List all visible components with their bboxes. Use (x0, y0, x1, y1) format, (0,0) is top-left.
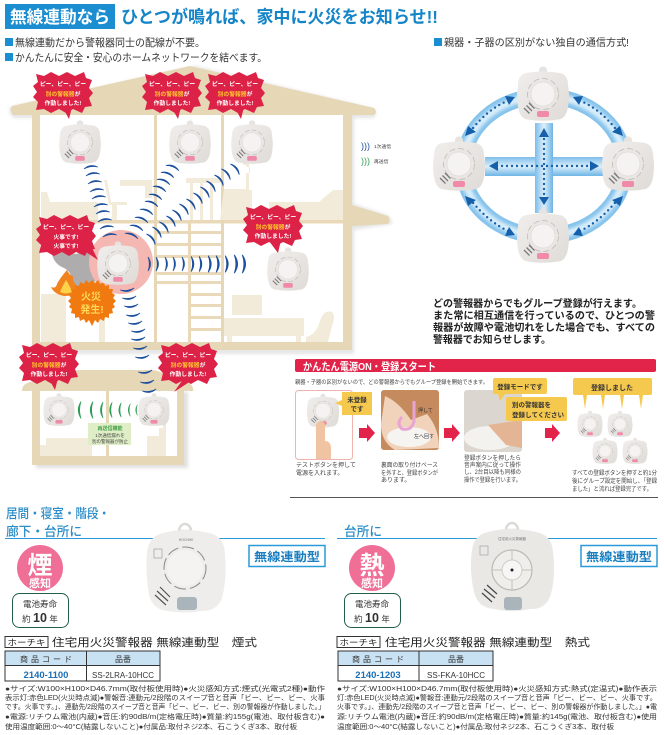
title headline: ひとつが鳴れば、家中に火災をお知らせ!! (121, 7, 438, 27)
burst: basement left: 作動しました! (31, 370, 67, 378)
burst: fire alarm: ピー、ピー、ピー (43, 224, 89, 231)
network detectors (433, 66, 654, 263)
steps intro: 親器・子器の区別がないので、どの警報器からでもグループ登録を開始できます。 (295, 378, 488, 386)
spec text: 温度範囲:0～40°C(結露しないこと)●付属品:取付ネジ2本、石こうくぎ3本、取付板 (337, 722, 614, 731)
panel: heat detector product (337, 523, 657, 731)
panel: network diagram (433, 36, 656, 346)
battery life (344, 594, 400, 628)
heat badge (349, 545, 395, 591)
burst: top left: ピー、ピー、ピー (40, 81, 86, 88)
house structure (10, 66, 392, 354)
burst: top right: 作動しました! (217, 99, 253, 107)
category heading: 廊下・台所に (6, 524, 82, 539)
smoke badge: 煙 (27, 552, 53, 580)
product name (337, 635, 590, 649)
burst: top right: 別の警報器が (218, 90, 253, 98)
heat badge: 熱 (359, 552, 385, 580)
smoke badge (17, 545, 63, 591)
wave legend (361, 141, 391, 166)
step 4: ました」と流れば登録完了です。 (572, 485, 652, 493)
step 4: すべての登録ボタンを押すと約1分 (572, 469, 657, 477)
furniture silhouettes (41, 162, 343, 342)
network description: また常に相互通信を行っているので、ひとつの警 (433, 309, 656, 322)
step 3 (464, 378, 567, 484)
battery life (12, 594, 68, 628)
wireless type tag: 無線連動型 (254, 549, 320, 564)
burst: basement right: 別の警報器が (171, 361, 206, 369)
staircase (157, 223, 222, 342)
burst: basement left: ピー、ピー、ピー (26, 352, 72, 359)
burst: right room: 別の警報器が (256, 223, 291, 231)
burst: top right (205, 72, 265, 119)
wave legend: ))) (361, 156, 370, 166)
burst: fire alarm (36, 215, 98, 260)
network description: 警報器でお知らせします。 (433, 333, 551, 346)
category heading: 台所に (344, 524, 382, 539)
wireless waves: blue (84, 162, 246, 393)
spec text: 灯:赤色LED(火災時点滅)●警報音:連動元/2段階のスイープ音と音声「ビー、ビー、ビー、火事です。 (337, 693, 657, 702)
spec text: ●サイズ:W100×H100×D46.7mm(取付板使用時)●火災感知方式:煙式(光電式2種)●動作 (5, 684, 325, 693)
step 1: テストボタンを押して (296, 461, 356, 469)
step 1: 電源を入れます。 (296, 469, 343, 477)
burst: fire alarm: 火事です! (53, 233, 79, 241)
fire burst label (68, 280, 116, 326)
wave legend: 1次通信 (374, 143, 391, 150)
product table (338, 651, 493, 681)
product name: ホーチキ (8, 638, 46, 648)
product name (5, 635, 257, 649)
resend note: 1次通信漏れを (95, 432, 125, 439)
burst: right room: 作動しました! (255, 232, 291, 240)
fire burst label: 火災 (81, 291, 101, 303)
speech bursts (19, 72, 303, 392)
burst: basement right: 作動しました! (170, 370, 206, 378)
burst: top left: 別の警報器が (46, 90, 81, 98)
arrow 3 (545, 424, 560, 442)
spec text: ●サイズ:W100×H100×D46.7mm(取付板使用時)●火災感知方式:熱式(定温式)●動作表示 (337, 684, 657, 693)
bullet text: left: かんたんに安全・安心のホームネットワークを結べます。 (15, 51, 267, 64)
wave legend: 再送信 (374, 158, 389, 165)
category heading: 居間・寝室・階段・ (6, 506, 110, 521)
product table: 商品コード (20, 654, 72, 664)
smoke (52, 252, 100, 286)
battery life: 約 10 年 (22, 611, 58, 625)
resend note: 再送信機能 (97, 425, 123, 432)
wireless type tag: 無線連動型 (586, 549, 652, 564)
burst: top centre: 作動しました! (154, 99, 190, 107)
burst: basement right (158, 343, 218, 392)
steps banner (295, 359, 656, 373)
product table: 品番 (448, 654, 464, 664)
house illustration (10, 66, 392, 468)
network description: 報器が故障や電池切れをした場合でも、すべての (433, 321, 655, 334)
burst: top centre: 別の警報器が (155, 90, 190, 98)
smoke badge: 感知 (29, 576, 51, 590)
product photo: heat detector (471, 523, 554, 611)
fire flame (51, 270, 81, 296)
step 3: 登録してください (512, 410, 564, 419)
spec text (5, 684, 325, 731)
step 3: 登録ボタンを押したら (464, 454, 521, 462)
network heading: 親器・子器の区別がない独自の通信方式! (444, 36, 629, 49)
step 2: 左へ回す (414, 433, 434, 440)
alarm glow (89, 230, 153, 294)
spec text: 表示灯:赤色LED(火災時点滅)●警報音:連動元/2段階のスイープ音と音声「ビー、ビー、ビー、火事 (5, 693, 325, 702)
product table: SS-FKA-10HCC (427, 671, 485, 680)
burst: right room: ピー、ピー、ピー (250, 214, 296, 221)
product table: 品番 (115, 654, 131, 664)
product photo: heat detector: 住宅用火災警報器 (498, 536, 526, 541)
step 3: し、2台目以降も同様の (464, 468, 521, 476)
network description: どの警報器からでもグループ登録が行えます。 (433, 297, 642, 310)
title banner (5, 4, 438, 29)
wireless type tag (249, 546, 325, 566)
resend note (88, 423, 131, 445)
bullet text: left (5, 36, 267, 64)
step 3: 音声案内に従って操作 (464, 461, 521, 469)
step 2 (381, 390, 439, 484)
battery life: 電池寿命 (23, 599, 57, 609)
burst: fire alarm: 火事です! (53, 242, 79, 250)
step 1 (296, 390, 372, 477)
product photo: smoke detector (146, 524, 226, 612)
step 1: です (350, 405, 364, 413)
burst: basement right: ピー、ピー、ピー (165, 352, 211, 359)
step 1: 未登録 (347, 395, 367, 404)
burst: top left: 作動しました! (45, 99, 81, 107)
product table: 商品コード (352, 654, 404, 664)
spec text: 火事です。」、連動先/2段階のスイープ音と音声「ビー、ビー、ビー、別の警報器が作動しました。」●電 (337, 702, 657, 711)
panel: setup steps (295, 359, 657, 493)
step 2: 押して (418, 407, 433, 414)
heat badge: 感知 (361, 576, 383, 590)
wireless waves: green (78, 401, 137, 419)
battery life: 約 10 年 (354, 611, 390, 625)
arrow 2 (444, 424, 460, 442)
dotted arrows (465, 96, 623, 236)
burst: top right: ピー、ピー、ピー (212, 81, 258, 88)
steps banner: かんたん電源ON・登録スタート (303, 360, 436, 373)
resend note: 別の警報器が防止 (92, 438, 128, 445)
wave legend: ))) (361, 141, 370, 151)
step 4: 後にグループ設定を開始し、「登録 (572, 477, 657, 485)
product table (5, 651, 160, 681)
burst: top left (33, 72, 93, 119)
burst: basement left: 別の警報器が (32, 361, 67, 369)
spec text: 源:リチウム電池(内蔵)●音圧:約90dB/m(定格電圧時)●質量:約145g(電池、取付板含む)●使用 (337, 712, 657, 721)
category heading (6, 506, 110, 539)
fire burst label: 発生! (80, 303, 104, 316)
product name: 住宅用火災警報器 無線連動型 熱式 (385, 635, 590, 649)
spec text: ●電源:リチウム電池(内蔵)●音圧:約90dB/m(定格電圧時)●質量:約155g(電池、取付板含む)● (5, 712, 325, 721)
burst: top centre (142, 72, 202, 119)
arrow 1 (359, 424, 375, 442)
step 3: 登録モードです (497, 382, 543, 391)
divider (290, 497, 658, 498)
detectors in house (43, 120, 309, 426)
step 2: 裏面の取り付けベース (381, 461, 438, 469)
title label: 無線連動なら (10, 8, 110, 27)
product table: 2140-1203 (355, 670, 401, 681)
spec text: です。火事です。」、連動先/2段階のスイープ音と音声「ビー、ビー、ビー、別の警報器が作動しました。」 (5, 702, 325, 711)
burst: top centre: ピー、ピー、ピー (149, 81, 195, 88)
product table: 2140-1100 (24, 670, 68, 681)
burst: right room (243, 205, 303, 253)
step 4 (572, 378, 657, 493)
spec text: 使用温度範囲:0～40°C(結露しないこと)●付属品:取付ネジ2本、石こうくぎ3本、取付板 (5, 722, 297, 731)
panel: smoke detector product (5, 506, 325, 731)
step 2: を外すと、登録ボタンが (381, 469, 438, 477)
burst: basement left (19, 343, 79, 390)
network ring (463, 96, 625, 236)
basement structure (22, 370, 193, 468)
product name: 住宅用火災警報器 無線連動型 煙式 (52, 635, 257, 649)
step 3: 別の警報器を (512, 400, 551, 409)
network description (433, 297, 656, 346)
step 2: あります。 (381, 477, 410, 484)
spec text (337, 684, 657, 731)
product photo: smoke detector: HOCHIKI (179, 538, 193, 542)
step 4: 登録しました (591, 383, 633, 392)
wireless type tag (581, 546, 657, 566)
product table: SS-2LRA-10HCC (92, 671, 154, 680)
battery life: 電池寿命 (355, 599, 389, 609)
bullet text: left: 無線連動だから警報器同士の配線が不要。 (15, 36, 205, 49)
product name: ホーチキ (340, 638, 378, 648)
step 3: 操作で登録を行います。 (464, 476, 521, 484)
